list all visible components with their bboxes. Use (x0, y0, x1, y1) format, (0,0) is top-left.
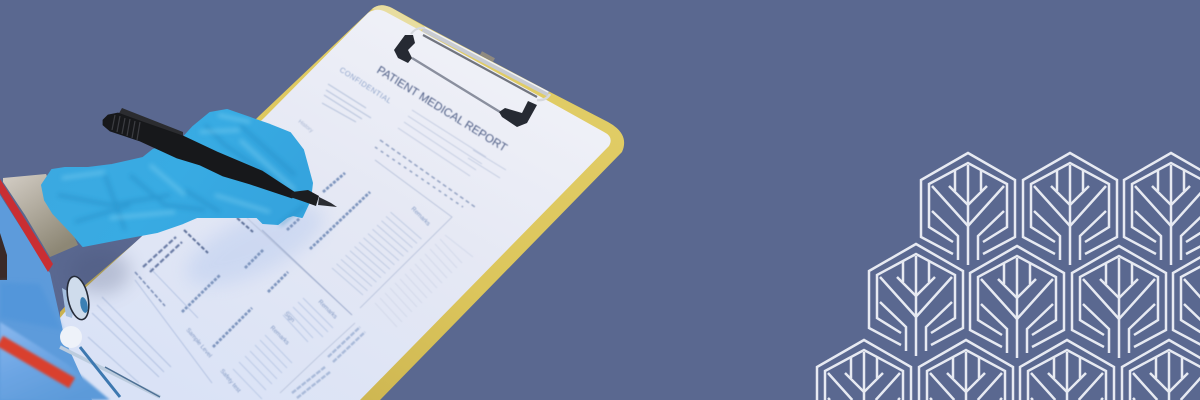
report content (88, 64, 509, 399)
metal clip (411, 27, 550, 112)
dense text columns (143, 237, 182, 272)
white ball (60, 326, 82, 348)
faint ruled lines (375, 235, 473, 327)
pen body (103, 113, 294, 198)
clip left loop (411, 28, 425, 34)
small ruled block (283, 298, 333, 342)
pen collar (290, 190, 319, 206)
clipboard with report (60, 5, 624, 400)
left table lines (88, 268, 212, 383)
clip right grip (499, 101, 537, 127)
pen clip (118, 108, 183, 137)
glove highlights (62, 115, 295, 218)
hand shadow on paper (175, 188, 335, 302)
stethoscope tube (62, 288, 76, 318)
clip wire (412, 58, 500, 112)
clip bar highlight (424, 27, 548, 92)
scrubs fold (0, 282, 62, 330)
dark divider line (262, 230, 352, 315)
black pen (103, 108, 337, 207)
remarks labels: Remarks (410, 206, 431, 227)
yellow clipboard board (60, 5, 624, 400)
stethoscope head (64, 274, 92, 322)
glove body (42, 110, 312, 246)
bottom notes block (292, 327, 365, 398)
confidential text lines (322, 84, 371, 122)
remarks ruled lines (332, 212, 422, 295)
condition table rows (380, 140, 475, 207)
divider lines (247, 160, 452, 393)
remarks labels: Safety test (218, 368, 241, 394)
shadow beneath arm (70, 250, 130, 294)
hexagon tile row 3 (817, 340, 1200, 400)
clip left grip (394, 35, 415, 63)
scrubs collar shadow (0, 233, 7, 280)
lower scrubs pocket (0, 322, 110, 400)
hexagon tile row 1 (921, 153, 1200, 265)
glove folds (58, 125, 305, 230)
red pen blurred (0, 341, 72, 383)
patient details lines (398, 110, 506, 178)
history label: History (297, 119, 314, 134)
stethoscope lens (79, 296, 89, 314)
hexagon tree pattern (817, 153, 1200, 400)
clip right loop (537, 94, 550, 100)
remarks labels: Sample Level (184, 327, 212, 359)
paper sheet (60, 10, 611, 400)
remarks labels: Remarks (317, 299, 338, 320)
lower ruled block (233, 335, 292, 399)
clip rivet (481, 53, 494, 60)
checkbox rows (182, 173, 370, 347)
clip upper bar (423, 29, 548, 94)
confidential label: CONFIDENTIAL (338, 65, 393, 105)
scrubs (0, 195, 92, 400)
blue glove (42, 110, 312, 246)
clip lower bar (423, 35, 537, 97)
hexagon tile row 2 (869, 244, 1200, 358)
pen nib (318, 197, 337, 207)
remarks labels: Remarks (269, 325, 290, 346)
remarks labels: Sign (283, 311, 295, 324)
silver pen in pocket (60, 347, 160, 397)
remarks labels (184, 206, 431, 394)
pale yellow top strip (372, 5, 425, 32)
arm (3, 174, 78, 257)
report title: PATIENT MEDICAL REPORT (374, 64, 509, 155)
stethoscope (62, 274, 92, 322)
pen grip ribs (112, 115, 140, 140)
red collar piping (0, 179, 53, 272)
